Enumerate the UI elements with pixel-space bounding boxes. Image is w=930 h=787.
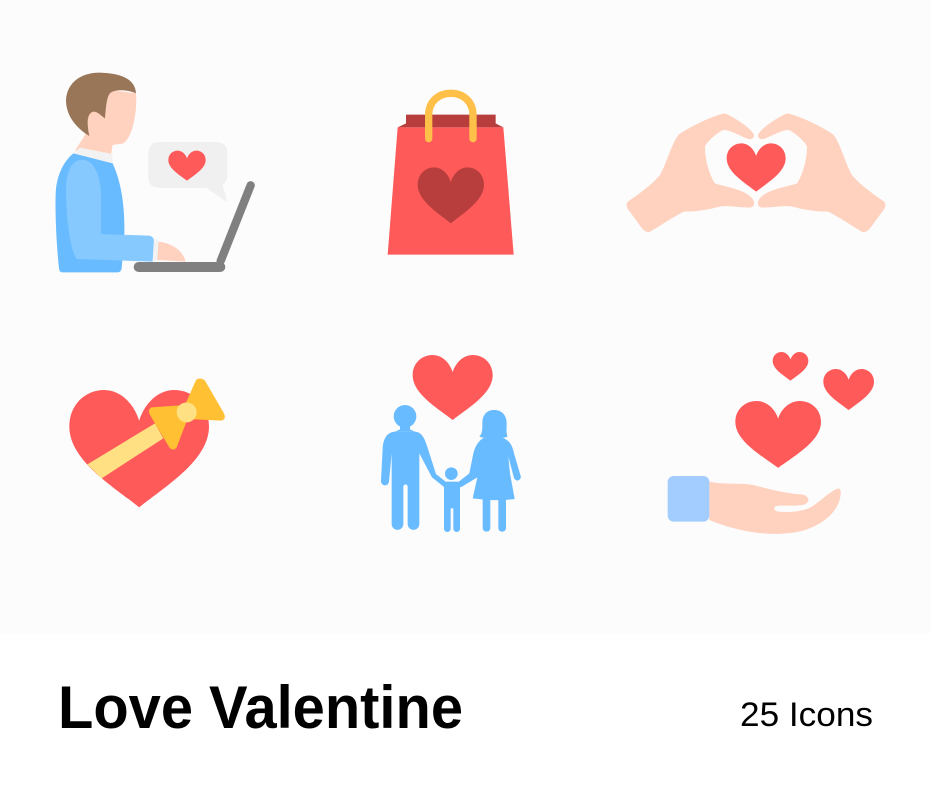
figure: mother bbox=[457, 410, 521, 532]
figure: father bbox=[381, 405, 449, 530]
icon: shopping bag bbox=[388, 93, 514, 255]
icon: man at laptop bbox=[56, 73, 251, 272]
icon count: 25 Icons bbox=[740, 696, 873, 734]
icon: heart gift with bow bbox=[69, 378, 225, 507]
icon: family with heart bbox=[381, 355, 521, 532]
icon: hands forming heart bbox=[627, 113, 885, 232]
title: Love Valentine bbox=[58, 674, 463, 741]
figure: child bbox=[444, 467, 460, 532]
icon: hand holding hearts bbox=[668, 352, 874, 534]
